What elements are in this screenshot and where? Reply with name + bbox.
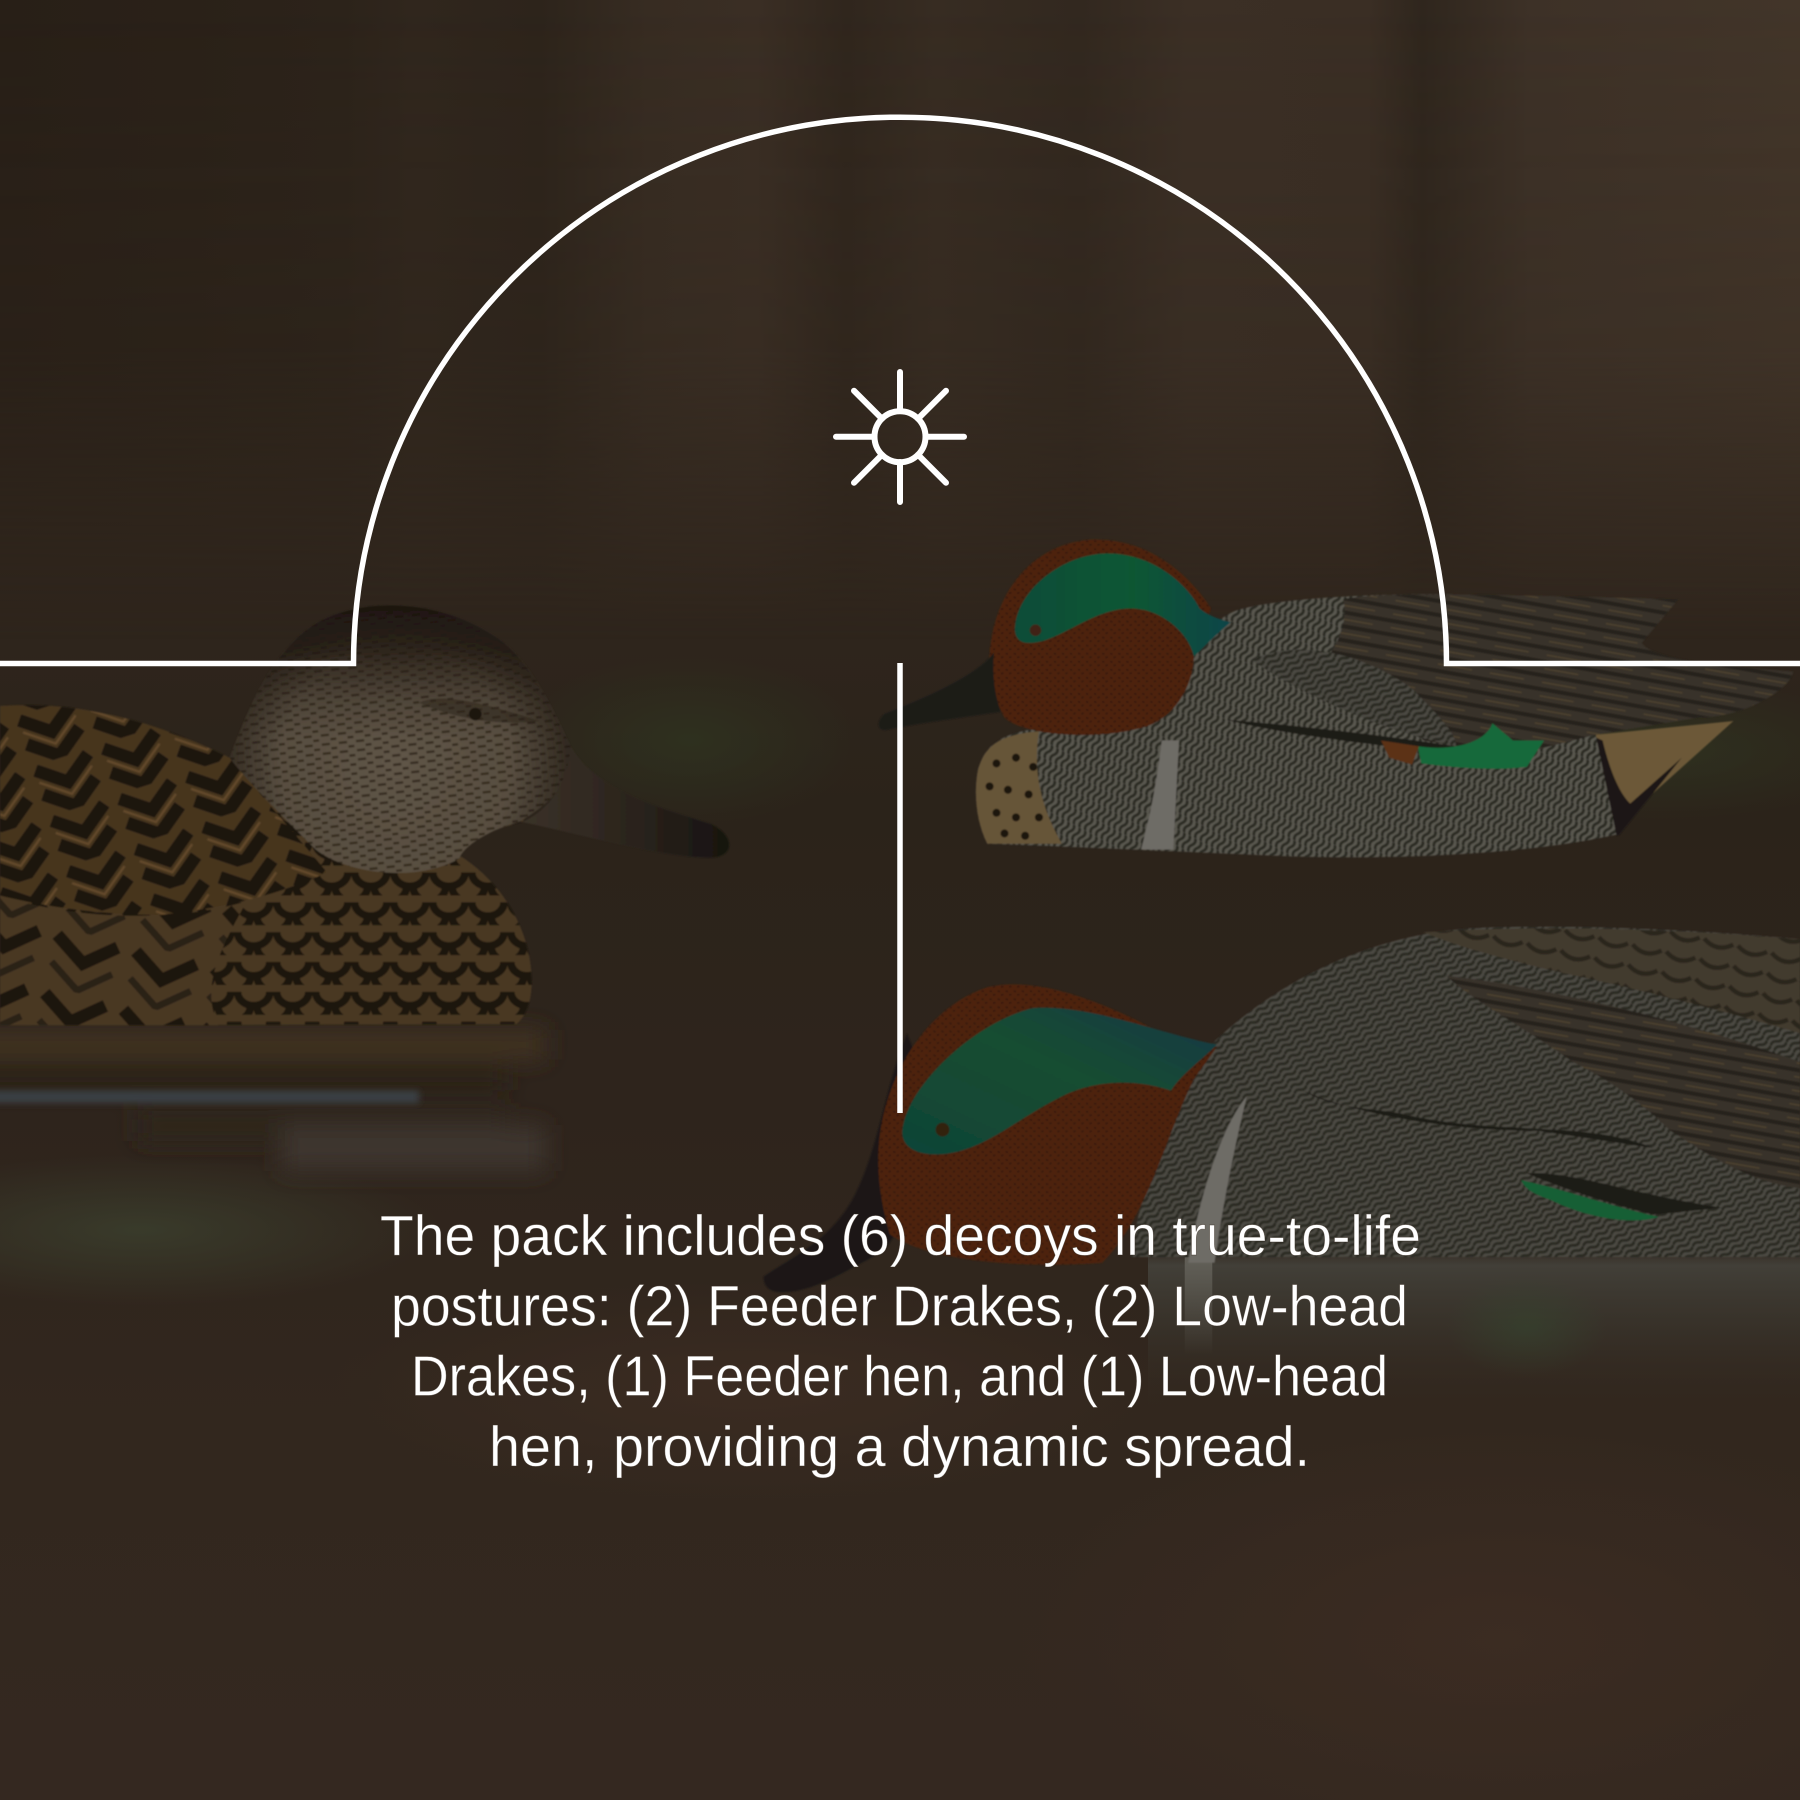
- wing feathers: [1320, 594, 1793, 752]
- wing shadow line: [1303, 1091, 1653, 1148]
- hen head edge shading: [230, 605, 571, 873]
- hen flank: [0, 895, 247, 1025]
- hen crown shading: [230, 605, 571, 827]
- water reflection under low-head drake: [1148, 1246, 1800, 1412]
- hen wing chevrons: [0, 705, 327, 915]
- wing feathers: [1446, 976, 1800, 1188]
- description text: Drakes, (1) Feeder hen, and (1) Low-head: [411, 1344, 1388, 1408]
- back feathers: [1424, 928, 1800, 1033]
- spotted breast: [976, 731, 1062, 844]
- head green patch: [1015, 553, 1231, 657]
- vertical divider line: [897, 663, 903, 1113]
- body: [1131, 927, 1800, 1257]
- body: [976, 594, 1616, 857]
- neck and bill: [763, 1033, 953, 1292]
- hen body: [0, 605, 571, 1025]
- scapular feathers: [1251, 650, 1456, 746]
- semicircle outline with horizon line: [0, 117, 1800, 663]
- flank shadow line: [1226, 720, 1456, 753]
- hen eye: [469, 708, 482, 720]
- hen bill: [522, 746, 729, 858]
- head chestnut: [878, 984, 1217, 1265]
- bill: [878, 652, 1001, 730]
- white shoulder streak: [1188, 1096, 1247, 1263]
- speculum green: [1418, 723, 1544, 769]
- description text: [380, 1204, 1421, 1479]
- hen eye stripe: [419, 698, 540, 723]
- tail buff: [1596, 721, 1733, 835]
- white shoulder streak: [1141, 740, 1179, 850]
- duck: low-head teal drake (bottom right): [763, 927, 1800, 1292]
- speculum green: [1521, 1180, 1659, 1221]
- description text: hen, providing a dynamic spread.: [489, 1415, 1310, 1479]
- hen head: [230, 605, 571, 873]
- head chestnut: [989, 539, 1211, 735]
- description text: The pack includes (6) decoys in true-to-life: [380, 1204, 1421, 1268]
- breast spots: [986, 754, 1043, 840]
- eye: [936, 1123, 949, 1137]
- hen water reflection: [0, 1030, 545, 1171]
- description text: postures: (2) Feeder Drakes, (2) Low-head: [391, 1274, 1408, 1338]
- icon: sun: [836, 372, 964, 502]
- tail black edge: [1590, 735, 1682, 836]
- head green patch: [902, 1008, 1217, 1154]
- wing lower dark: [1527, 1173, 1722, 1215]
- duck: green-winged teal drake, upright (top right): [878, 539, 1793, 857]
- duck: feeding hen (left): [0, 605, 729, 1025]
- eye: [1030, 625, 1041, 636]
- wing orange bar: [1381, 740, 1419, 765]
